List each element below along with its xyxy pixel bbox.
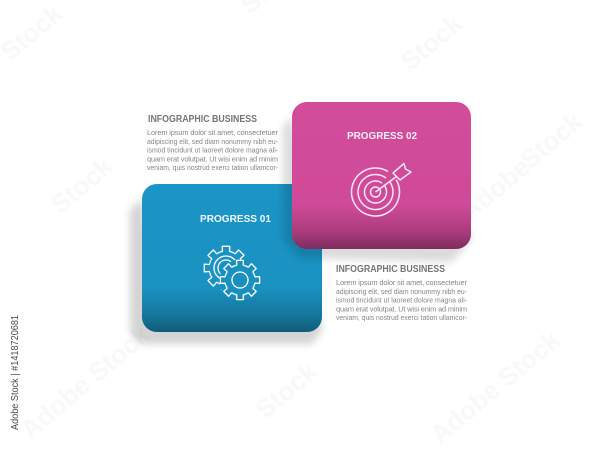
paragraph: bottom right [336, 278, 468, 322]
label: progress 01: PROGRESS 01 [200, 213, 271, 225]
icon: gears [204, 246, 260, 300]
credit: stock id: Adobe Stock | #1418720681 [9, 315, 21, 430]
watermark: Stock [515, 106, 589, 175]
watermark: Adobe [455, 152, 536, 227]
watermark: Stock [395, 8, 469, 77]
card shadow: pink [283, 116, 471, 262]
paragraph: top left [147, 128, 279, 172]
label: progress 02: PROGRESS 02 [347, 130, 417, 142]
paragraph: top left: ismod tincidunt ut laoreet dolore magna ali- [147, 146, 278, 154]
paragraph: top left: quam erat volutpat. Ut wisi enim ad minim [147, 154, 278, 164]
paragraph: top left: veniam, quis nostrud exerci tation ullamcor- [147, 163, 278, 172]
icon: target with arrow [343, 159, 411, 225]
card: blue [142, 184, 322, 332]
heading: bottom right: INFOGRAPHIC BUSINESS [336, 264, 445, 275]
paragraph: bottom right: veniam, quis nostrud exerci tation ullamcor- [336, 313, 467, 322]
panel: progress 02 [283, 102, 471, 262]
watermark: Stock [250, 356, 324, 425]
paragraph: top left: Lorem ipsum dolor sit amet, consectetuer [147, 128, 279, 137]
paragraph: bottom right: Lorem ipsum dolor sit amet, consectetuer [336, 278, 468, 287]
card: pink [292, 102, 471, 249]
card shadow: blue [130, 198, 322, 344]
paragraph: bottom right: quam erat volutpat. Ut wisi enim ad minim [336, 304, 467, 314]
paragraph: top left: adipiscing elit, sed diam nonummy nibh eu- [147, 137, 278, 146]
watermark: Adobe Stock [425, 324, 566, 450]
paragraph: bottom right: ismod tincidunt ut laoreet dolore magna ali- [336, 296, 467, 304]
watermark: Adobe Stock [15, 319, 156, 445]
paragraph: bottom right: adipiscing elit, sed diam nonummy nibh eu- [336, 287, 467, 296]
heading: top left: INFOGRAPHIC BUSINESS [148, 114, 257, 125]
watermark: Stock [45, 151, 119, 220]
panel: progress 01 [130, 184, 322, 344]
text block: top left [147, 114, 279, 172]
text block: bottom right [336, 264, 468, 322]
